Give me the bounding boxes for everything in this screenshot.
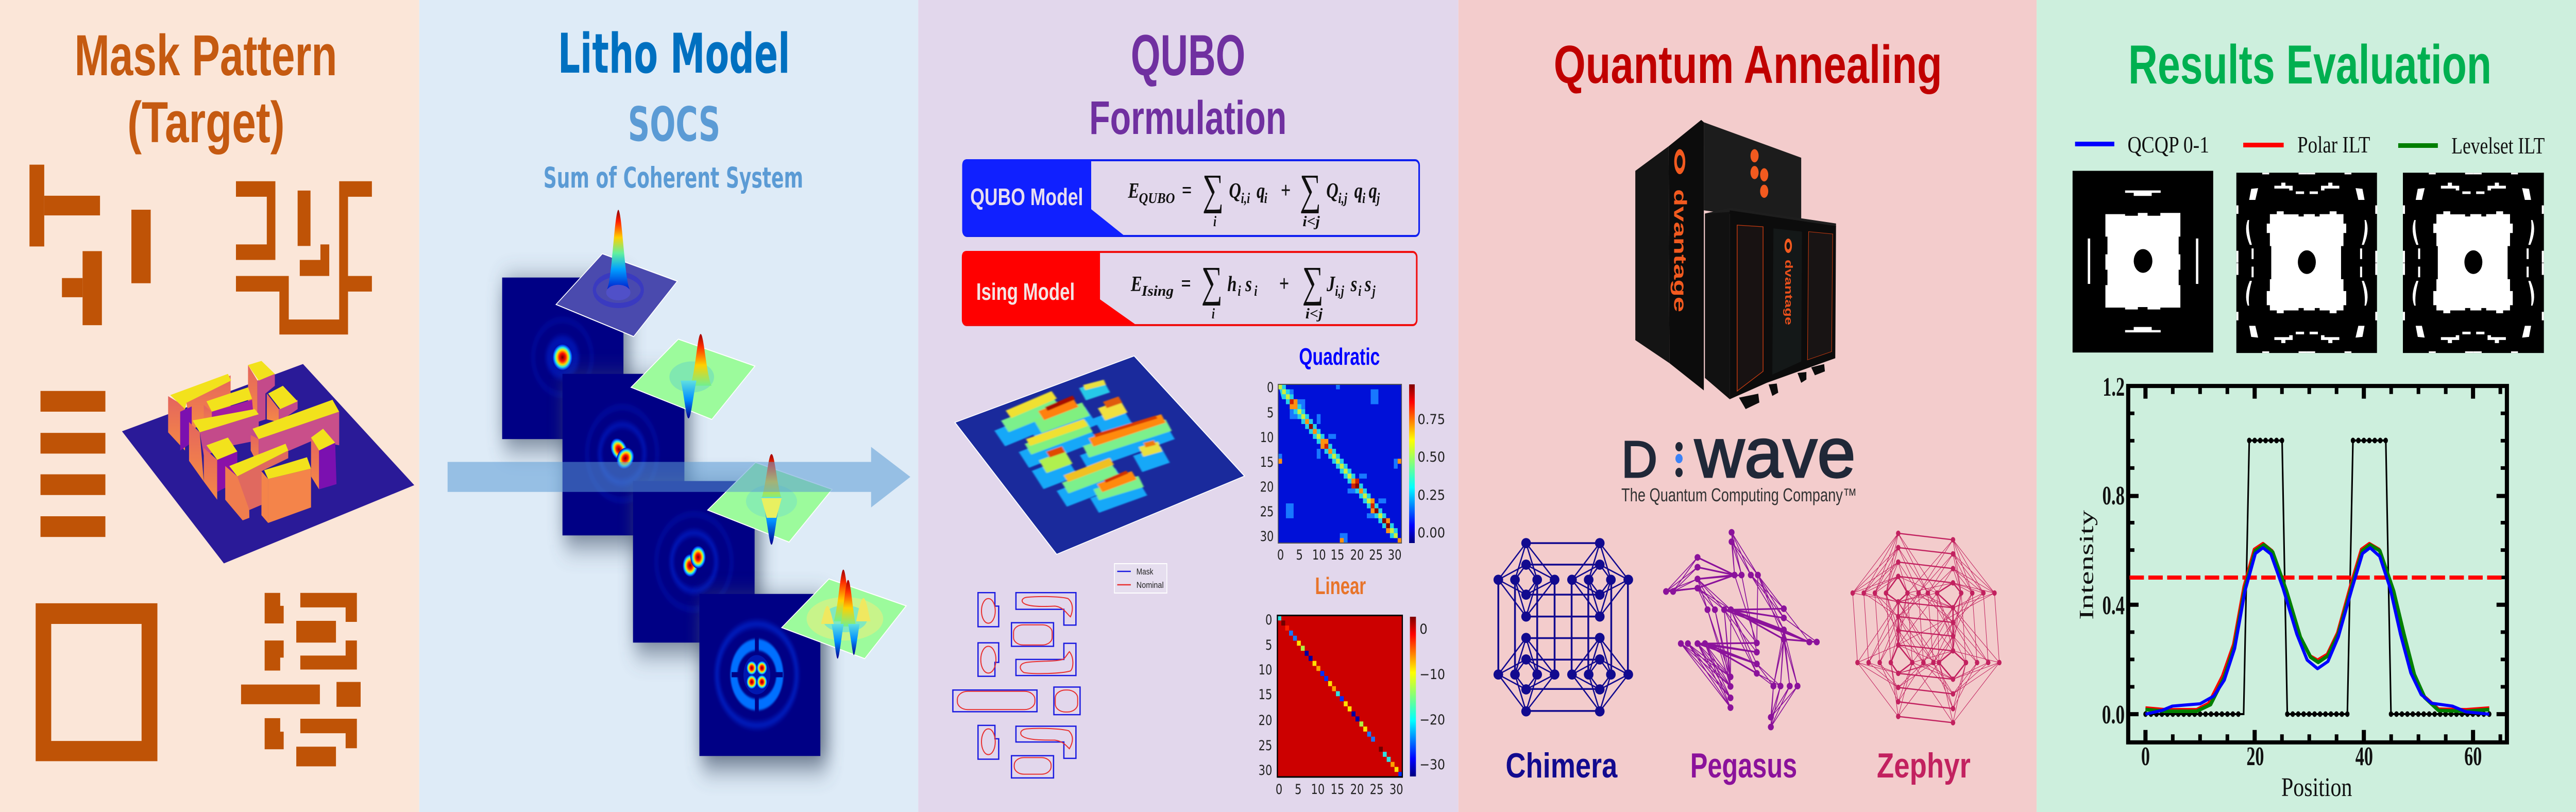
SOCS kernel stack: [448, 210, 910, 766]
heatmap: Quadratic: 5: [1296, 547, 1303, 563]
kernel 2: [563, 374, 690, 545]
Ising model equation box: ∑: [1201, 258, 1223, 306]
heatmap: Quadratic: 10: [1260, 429, 1274, 446]
method legend: QCQP 0-1: [2127, 131, 2209, 158]
panel: mask pattern target: [0, 0, 419, 812]
heatmap: Quadratic: 0.50: [1417, 449, 1445, 465]
graph: Zephyr: [1851, 531, 2002, 725]
heatmap: Quadratic: 30: [1388, 547, 1401, 563]
surface 3: [708, 454, 832, 545]
surface 4: [782, 570, 906, 658]
QUBO model equation box: i: [1362, 191, 1365, 207]
graph labels: Pegasus: [1690, 746, 1797, 785]
graph labels: Chimera: [1505, 746, 1618, 785]
panel: QUBO formulation: [918, 0, 1459, 812]
QUBO model equation box: QUBO Model: [970, 184, 1083, 210]
Ising model equation box: E: [1130, 272, 1142, 296]
QUBO model equation box: QUBO: [1139, 191, 1175, 207]
heatmap: Linear: 20: [1350, 781, 1364, 798]
QUBO model equation box: =: [1182, 178, 1192, 203]
heading: Quantum Annealing: Quantum Annealing: [1554, 35, 1942, 94]
Quadratic label: Quadratic: [1299, 344, 1380, 370]
D-Wave Advantage machine: dvantage: [1670, 189, 1690, 312]
D-Wave logo: D: [1621, 431, 1657, 488]
heading: Litho Model SOCS: [544, 23, 803, 194]
contour legend: [1114, 564, 1167, 593]
QUBO model equation box: q: [1257, 179, 1265, 203]
heatmap: Linear: 10: [1311, 781, 1325, 798]
Ising model equation box: j: [1370, 284, 1376, 299]
heading: Results Evaluation: Results Evaluation: [2128, 34, 2492, 95]
heatmap: Linear: 0: [1265, 612, 1272, 628]
3D aerial image surface: [955, 356, 1245, 554]
axis labels: 0.8: [2103, 481, 2125, 511]
Ising model equation box: i<j: [1306, 307, 1323, 322]
heatmap: Linear: 20: [1259, 712, 1272, 729]
intensity line chart: [2075, 373, 2507, 802]
QUBO model equation box: +: [1281, 178, 1291, 203]
kernel 4: [700, 594, 827, 766]
heatmap: Quadratic: 30: [1260, 528, 1274, 545]
QUBO model equation box: q: [1369, 179, 1377, 203]
graph: Chimera: [1494, 538, 1633, 717]
colorbar: [1409, 384, 1415, 543]
heatmap: Linear: 25: [1370, 781, 1384, 798]
heatmap: Linear: 25: [1259, 737, 1272, 754]
heatmap: Linear: 5: [1265, 637, 1272, 653]
heatmap: Quadratic: 10: [1312, 547, 1326, 563]
plot frame and ticks: [2128, 386, 2507, 742]
graph: Pegasus: [1663, 529, 1820, 730]
heatmap: Quadratic: 25: [1369, 547, 1383, 563]
heatmap: Quadratic: 15: [1331, 547, 1344, 563]
Ising model equation box: s: [1245, 272, 1252, 296]
panel: quantum annealing: [1459, 0, 2037, 812]
QUBO model equation box: Q: [1326, 179, 1338, 203]
heatmap: Linear: −30: [1419, 756, 1445, 773]
heatmap: Quadratic: 15: [1260, 454, 1274, 470]
QUBO model equation box: j: [1375, 191, 1380, 207]
Ising model equation box: Ising Model: [976, 279, 1075, 305]
Ising model equation box: =: [1181, 271, 1191, 296]
mask contour plot: [953, 593, 1080, 778]
heatmap: Quadratic: 0.00: [1417, 525, 1445, 541]
QUBO model equation box: i: [1213, 214, 1216, 230]
QUBO model equation box: i<j: [1302, 214, 1320, 230]
QUBO model equation box: i,j: [1338, 191, 1348, 207]
axis labels: 0: [2141, 742, 2150, 771]
heatmap: Linear: 0: [1419, 621, 1428, 637]
heatmap: Linear: 15: [1331, 781, 1344, 798]
axis labels: 20: [2246, 742, 2264, 771]
heatmap: Linear: 15: [1259, 686, 1272, 703]
mask shapes: [29, 165, 372, 766]
optimized mask: QCQP 0-1: [2073, 171, 2213, 352]
method legend: [2075, 131, 2545, 159]
target profile: [2145, 441, 2489, 714]
Ising model equation box: J: [1326, 272, 1335, 296]
QUBO model equation box: ∑: [1202, 166, 1224, 214]
panel: results evaluation: [2037, 0, 2576, 812]
Ising model equation box: h: [1227, 272, 1236, 296]
Ising model equation box: s: [1350, 272, 1357, 296]
graph labels: Zephyr: [1877, 746, 1971, 785]
heatmap: Quadratic: 5: [1267, 404, 1274, 421]
heading: Litho Model SOCS: Litho Model: [558, 23, 790, 86]
intensity curves: [2145, 544, 2489, 714]
axis labels: [2075, 373, 2482, 802]
surface 1: [556, 210, 677, 336]
heading: Mask Pattern (Target): (Target): [127, 91, 285, 155]
heatmap: Linear: 30: [1259, 762, 1272, 779]
method legend: Levelset ILT: [2451, 132, 2545, 159]
heatmap: Linear: −20: [1419, 712, 1445, 728]
contour legend: Nominal: [1137, 580, 1164, 590]
heatmap: Quadratic: 20: [1350, 547, 1364, 563]
axis labels: 0.0: [2102, 700, 2125, 730]
heatmap: Quadratic: 20: [1260, 479, 1274, 495]
QUBO model equation box: E: [1128, 179, 1139, 203]
heatmap: Quadratic: 0.75: [1417, 411, 1445, 428]
D-Wave Advantage machine: dvantage: [1783, 260, 1794, 325]
heatmap: Quadratic: 0.25: [1417, 487, 1445, 503]
optimized mask: Levelset ILT: [2403, 173, 2544, 353]
D-Wave logo: [1621, 413, 1857, 505]
arrow: [448, 447, 910, 508]
heading: Mask Pattern (Target): [75, 24, 337, 155]
axis labels: Intensity: [2075, 510, 2097, 620]
Ising model equation box: ∑: [1302, 258, 1324, 306]
heading: QUBO Formulation: QUBO: [1131, 24, 1245, 88]
axis labels: 40: [2355, 742, 2373, 771]
Ising model equation box: i,j: [1335, 284, 1345, 299]
kernel 1: [502, 278, 629, 447]
heatmap: Linear: 0: [1276, 781, 1282, 798]
surface 2: [631, 334, 755, 419]
axis labels: 1.2: [2103, 373, 2125, 402]
QUBO model equation box: [962, 159, 1419, 236]
axis labels: Position: [2281, 773, 2352, 802]
Ising model equation box: i: [1238, 284, 1241, 299]
panel: litho model: [419, 0, 918, 812]
QUBO model equation box: i,i: [1241, 191, 1250, 207]
Ising model equation box: i: [1358, 284, 1361, 299]
QUBO model equation box: ∑: [1300, 166, 1321, 214]
contour legend: Mask: [1137, 567, 1154, 577]
heatmap: Linear: [1259, 612, 1445, 798]
QUBO model equation box: Q: [1229, 179, 1241, 203]
heading: QUBO Formulation: [1089, 24, 1286, 144]
QUBO model equation box: q: [1354, 179, 1363, 203]
Ising model equation box: i: [1212, 307, 1215, 322]
Ising model equation box: +: [1279, 271, 1289, 296]
heatmap: Quadratic: 0: [1277, 547, 1284, 563]
heatmap: Linear: 5: [1295, 781, 1301, 798]
heatmap: Linear: −10: [1419, 666, 1445, 683]
heatmap: Quadratic: [1260, 379, 1445, 563]
graph labels: [1505, 746, 1971, 785]
heading: Litho Model SOCS: SOCS: [628, 97, 720, 152]
D-Wave Advantage machine: [1635, 120, 1836, 409]
heading: QUBO Formulation: Formulation: [1089, 91, 1286, 144]
heading: Litho Model SOCS: Sum of Coherent System: [544, 161, 803, 194]
heading: Mask Pattern (Target): Mask Pattern: [75, 24, 337, 88]
Ising model equation box: i: [1254, 284, 1257, 299]
heatmap: Linear: 10: [1259, 662, 1272, 678]
Ising model equation box: [962, 251, 1417, 325]
Linear label: Linear: [1315, 573, 1366, 599]
QUBO model equation box: i: [1264, 191, 1267, 207]
3D mask surface: [122, 361, 414, 563]
kernel 3: [633, 481, 760, 652]
heatmap: Linear: 30: [1389, 781, 1403, 798]
heatmap: Quadratic: 25: [1260, 503, 1274, 520]
optimized mask: Polar ILT: [2236, 173, 2377, 353]
Ising model equation box: Ising: [1141, 284, 1174, 299]
heatmap: Quadratic: 0: [1267, 379, 1274, 396]
D-Wave logo: The Quantum Computing Company™: [1621, 485, 1857, 505]
Ising model equation box: s: [1364, 272, 1371, 296]
method legend: Polar ILT: [2297, 131, 2370, 158]
D-Wave logo: wave: [1694, 413, 1856, 492]
axis labels: 60: [2464, 742, 2482, 771]
colorbar: [1410, 617, 1416, 776]
threshold line: [2129, 576, 2505, 580]
axis labels: 0.4: [2103, 591, 2125, 620]
